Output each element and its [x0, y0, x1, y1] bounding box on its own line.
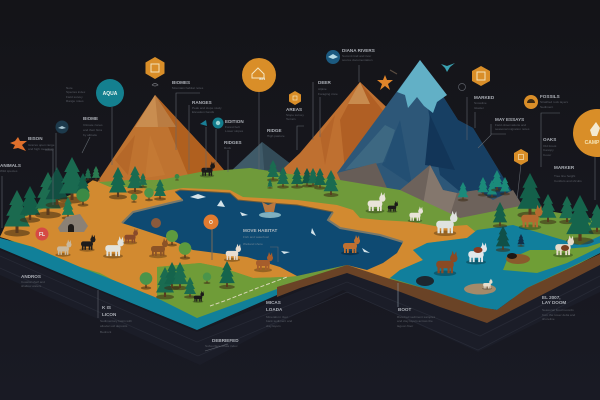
- label: oaks: Canopy: [543, 148, 554, 152]
- badge: small dark circle: [56, 120, 68, 170]
- label: top note: Species index: [66, 90, 86, 94]
- label: ranges: Peak and slope study: [192, 106, 222, 110]
- label: k is licon: Bedrock: [100, 330, 112, 334]
- label: andros: Coastal shelf and: [21, 280, 45, 284]
- label: deer: DEER: [318, 80, 331, 85]
- label: marker: Conifers and shrubs: [554, 179, 582, 183]
- label: move habitat: Wetland shore: [243, 242, 263, 246]
- label: el 2007 lay doom: from the lower delta and: [542, 313, 575, 317]
- icon: orange lake marker: O: [209, 220, 213, 226]
- label: micas: [266, 300, 292, 328]
- mountain: orange left peak: [92, 95, 228, 190]
- label: top note: Range notes: [66, 99, 84, 103]
- mountain: tall blue peak: [337, 60, 514, 205]
- label: el 2007 lay doom: EL 2007,: [542, 295, 561, 300]
- label: marker: MARKER: [554, 165, 575, 170]
- label: biome: by altitude: [83, 133, 97, 137]
- cave: [58, 214, 88, 232]
- label: k is licon: Sedimentary basin with: [100, 319, 132, 323]
- label: oaks: [543, 137, 557, 157]
- label: ranges: Elevation bands: [192, 110, 214, 114]
- forest: right: [458, 170, 600, 252]
- land: green base: [0, 168, 600, 320]
- badge: big orange circle right: [573, 109, 600, 200]
- badge: blue circle: [326, 50, 340, 64]
- label: move habitat: MOVE HABITAT: [243, 228, 277, 233]
- teal lagoon: [390, 225, 600, 310]
- label: fossils: Stratified rock layers: [540, 100, 568, 104]
- label: edition: Forest belt: [225, 125, 240, 129]
- label: biomes: BIOMES: [172, 80, 190, 85]
- mountain: grey ridge: [230, 142, 292, 180]
- label: top note: [66, 86, 86, 103]
- label: animals: ANIMALS: [0, 163, 21, 168]
- badge: big orange circle right: CAMP: [585, 140, 600, 146]
- label: ridges: Rock: [224, 146, 232, 150]
- label: andros: [21, 274, 45, 288]
- label: marked: [467, 95, 495, 140]
- label: bison: and high meadows: [28, 147, 54, 151]
- label: boot: and clay layers across the: [397, 319, 433, 323]
- label: move habitat: Fish and waterfowl: [243, 235, 269, 239]
- label: ridges: RIDGES: [224, 140, 242, 145]
- label: fossils: FOSSILS: [540, 94, 560, 99]
- label: areas: [286, 107, 304, 150]
- label: top note: Note: [66, 86, 73, 90]
- icon: red map marker: FL: [39, 232, 45, 238]
- animals: left plain: [55, 228, 273, 272]
- label: micas: Minerals in river: [266, 315, 288, 319]
- label: bison: BISON: [28, 136, 43, 141]
- label: ranges: RANGES: [192, 100, 212, 105]
- green islet: [503, 243, 600, 273]
- badge: orange hexagon left: [146, 57, 164, 79]
- label: edition: EDITION: [225, 119, 244, 124]
- teal front edge: [0, 238, 277, 330]
- label: may essays: Field observations and: [495, 123, 526, 127]
- label: k is licon: [98, 290, 132, 334]
- terrain underside strata: [0, 250, 600, 365]
- label: marker: Tree line height: [554, 174, 575, 178]
- badge: orange hexagon right: [472, 66, 490, 86]
- label: ridge: RIDGE: [267, 128, 282, 133]
- lake raft with antlers: [259, 202, 281, 218]
- label: ridges: [224, 140, 242, 172]
- icon: swirl: [458, 84, 466, 90]
- label: debriefed: [205, 338, 239, 351]
- label: k is licon: LICON: [102, 312, 117, 317]
- label: deer: [313, 80, 338, 140]
- label: micas: bank sediment and: [266, 319, 292, 323]
- rock slopes: [337, 163, 522, 224]
- label: areas: Terrain: [286, 117, 296, 121]
- label: boot: BOOT: [398, 307, 411, 312]
- label: biome: and their flora: [83, 128, 102, 132]
- brown soil edge: [277, 254, 600, 323]
- label: ranges: [189, 100, 222, 170]
- label: deer: Alpine: [318, 87, 327, 91]
- label: diana rivers: Summit trail and river: [342, 54, 371, 58]
- label: debriefed: DEBRIEFED: [212, 338, 239, 343]
- label: animals: Wild species: [0, 169, 18, 173]
- label: may essays: MAY ESSAYS: [495, 117, 524, 122]
- label: move habitat: [243, 228, 278, 262]
- badge: big orange circle top: Set: [259, 76, 266, 81]
- lake: [122, 190, 403, 276]
- badge: aqua circle: [96, 79, 124, 165]
- label: diana rivers: [342, 48, 375, 82]
- label: k is licon: alluvial soil deposits: [100, 324, 128, 328]
- label: oaks: Old forest: [543, 144, 557, 148]
- icon: teal bird: [441, 63, 455, 72]
- land: front green meadow: [157, 263, 287, 318]
- badge: orange small circle: [524, 95, 538, 109]
- label: may essays: [478, 117, 530, 148]
- label: biome: BIOME: [83, 116, 98, 121]
- label: marked: MARKED: [474, 95, 495, 100]
- label: edition: [225, 119, 244, 133]
- label: diana rivers: source documentation: [342, 58, 373, 62]
- animals: meadow and slopes: [193, 161, 574, 303]
- label: el 2007 lay doom: Seasonal flood records: [542, 308, 574, 312]
- label: micas: LOADA: [266, 307, 283, 312]
- label: top note: Field survey: [66, 95, 83, 99]
- label: debriefed: Subsurface strata index: [205, 344, 238, 348]
- dashed path: [210, 277, 287, 306]
- label: bison: Grazes open range: [28, 143, 55, 147]
- label: andros: ANDROS: [21, 274, 41, 279]
- label: bison: [28, 136, 55, 205]
- label: oaks: OAKS: [543, 137, 556, 142]
- label: may essays: seasonal migration notes: [495, 127, 530, 131]
- label: biomes: Mountain habitat notes: [172, 86, 204, 90]
- badge: orange hexagon lower right: [514, 149, 528, 200]
- label: boot: lagoon floor: [397, 324, 413, 328]
- icon: orange lake marker: [204, 214, 218, 260]
- label: el 2007 lay doom: shoreline: [542, 317, 555, 321]
- label: ridge: High pasture: [267, 134, 285, 138]
- label: k is licon: K IS: [102, 305, 111, 310]
- lake birds and fish: [190, 194, 370, 254]
- label: boot: Riverbed sediment samples: [397, 315, 436, 319]
- label: fossils: [540, 94, 568, 167]
- icon: red map marker: [36, 228, 48, 240]
- forest: centre: [267, 160, 338, 197]
- label: biomes: [172, 80, 204, 150]
- snow cap: [397, 60, 447, 113]
- label: diana rivers: DIANA RIVERS: [342, 48, 375, 53]
- forest: centre left: [109, 166, 179, 203]
- badge: aqua circle: AQUA: [103, 91, 118, 97]
- mountain: orange right peak: [284, 82, 400, 185]
- label: marked: Glacier: [474, 106, 484, 110]
- label: biome: [82, 116, 103, 153]
- label: micas: clay layers: [266, 324, 281, 328]
- label: andros: shallow waters: [21, 284, 42, 288]
- icon: small mark: [152, 84, 158, 86]
- forest: left: [4, 157, 100, 236]
- label: animals: [0, 163, 21, 228]
- lake sign: [151, 218, 161, 228]
- label: edition: Lower slopes: [225, 129, 244, 133]
- label: el 2007 lay doom: LAY DOOM: [542, 300, 566, 305]
- label: marker: [554, 165, 582, 183]
- forest: front meadow: [140, 230, 235, 299]
- label: oaks: Cover: [543, 153, 551, 157]
- icon: orange star: [377, 75, 393, 90]
- land: orange plain and banks: [0, 180, 477, 298]
- icon: orange leaf: [10, 137, 27, 151]
- label: marked: Snowline: [474, 101, 487, 105]
- label: deer: Foraging zone: [318, 92, 338, 96]
- badge: big orange circle top: [242, 58, 276, 170]
- label: areas: AREAS: [286, 107, 302, 112]
- animals: water: [341, 235, 530, 294]
- label: areas: Slope survey: [286, 113, 304, 117]
- label: boot: [397, 283, 436, 328]
- rock banks: [122, 200, 183, 223]
- badge: small hexagon: [289, 91, 301, 105]
- label: ridge: [267, 128, 285, 138]
- icon: dark bird: [390, 70, 397, 74]
- label: micas: MICAS: [266, 300, 281, 305]
- badge: teal small circle: [200, 118, 224, 170]
- label: fossils: Sediment: [540, 105, 553, 109]
- label: biome: Climate zones: [83, 123, 103, 127]
- label: el 2007 lay doom: [542, 295, 575, 321]
